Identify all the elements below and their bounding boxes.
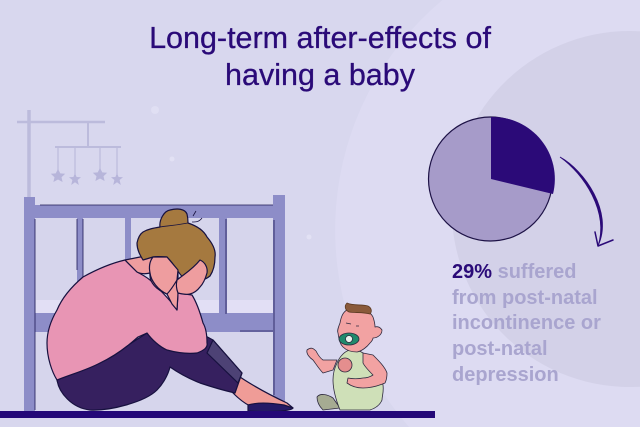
- illustration: sitting mother: [47, 209, 293, 412]
- pie chart: 29%: [428, 117, 555, 241]
- title: Long-term after-effects of: [149, 21, 491, 55]
- crib: [24, 195, 285, 411]
- text: statistic: from post-natal: [452, 287, 598, 309]
- illustration: baby: [307, 303, 387, 410]
- text: statistic: depression: [452, 364, 559, 386]
- icon: crib mobile: [17, 110, 123, 198]
- text: statistic: incontinence or: [452, 312, 601, 334]
- text: statistic: 29% suffered: [452, 261, 576, 283]
- text: statistic: [452, 261, 601, 386]
- arrow: [560, 157, 613, 246]
- title: having a baby: [225, 58, 415, 92]
- text: statistic: post-natal: [452, 338, 548, 360]
- floor: [0, 411, 435, 418]
- title: [149, 21, 492, 92]
